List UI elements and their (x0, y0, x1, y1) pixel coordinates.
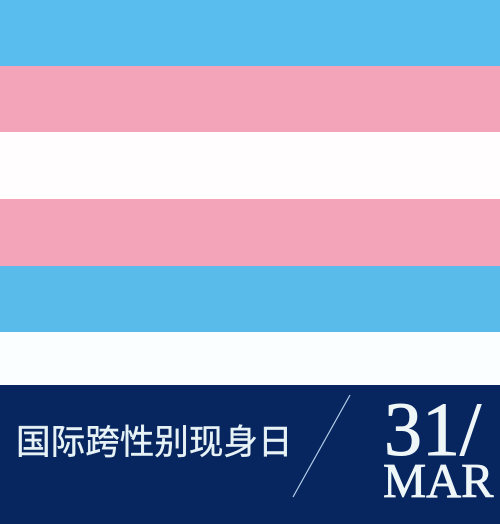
flag band: bottom white (0, 332, 500, 385)
date: month: MAR (383, 455, 494, 508)
flag band: top blue (0, 0, 500, 66)
flag band: upper pink (0, 66, 500, 132)
flag band: lower blue (0, 266, 500, 332)
date: day: 31/ (384, 388, 481, 472)
heading: International Transgender Day of Visibility: 国际跨性别现身日 (16, 424, 293, 462)
panel: navy caption bar (0, 385, 500, 524)
divider: diagonal line (292, 394, 350, 498)
flag band: middle white (0, 132, 500, 199)
flag band: lower pink (0, 199, 500, 266)
